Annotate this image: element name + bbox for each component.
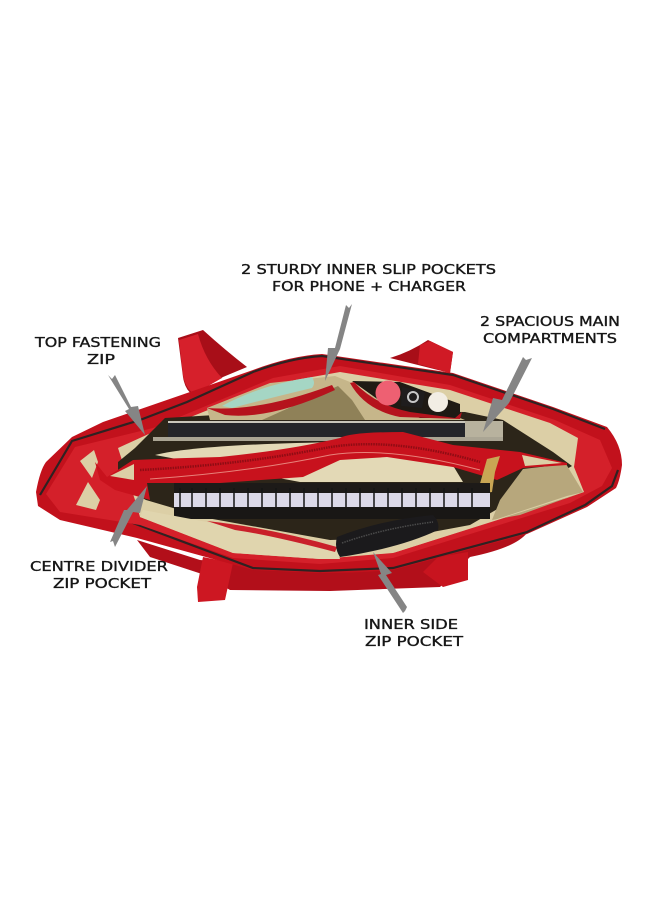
beige interior: [118, 372, 584, 559]
black piping on rim: [40, 356, 618, 571]
label: centre divider zip pocket: [30, 559, 168, 592]
dark interior cavity: [118, 410, 572, 540]
back handles: [178, 330, 453, 395]
bright red end walls: [46, 366, 612, 564]
slip pocket lining: [207, 376, 465, 420]
small beige folds at left end: [76, 450, 100, 510]
label: top fastening zip: [34, 335, 161, 368]
label: main compartments: [480, 314, 620, 347]
beige panel behind divider: [155, 442, 463, 482]
wallet in side zip pocket: [336, 515, 438, 557]
arrow: top fastening zip: [108, 375, 145, 435]
label: centre divider zip pocket: ZIP POCKET: [53, 576, 152, 592]
label: inner side zip pocket: [364, 617, 464, 650]
label: top fastening zip: ZIP: [87, 352, 115, 368]
arrow: main compartments: [483, 357, 532, 432]
centre divider zip pocket: [95, 432, 567, 500]
notebook: [174, 483, 490, 519]
lower left lining with pocket trim: [140, 510, 340, 559]
lower right beige lining: [393, 492, 584, 553]
label: inner side zip pocket: ZIP POCKET: [365, 634, 464, 650]
label: main compartments: COMPARTMENTS: [483, 331, 617, 347]
laptop: [153, 421, 503, 441]
arrow: inner side pocket: [373, 552, 407, 613]
lower outer body and front handles: [137, 533, 527, 602]
label: inner side zip pocket: INNER SIDE: [364, 617, 458, 633]
handbag photo illustration: [36, 330, 622, 602]
tan side lining at right: [492, 464, 583, 520]
label: main compartments: 2 SPACIOUS MAIN: [480, 314, 620, 330]
label: slip pockets: 2 STURDY INNER SLIP POCKETS: [241, 262, 496, 278]
arrow: centre divider: [110, 486, 147, 547]
label: slip pockets: FOR PHONE + CHARGER: [272, 279, 466, 295]
label: centre divider zip pocket: CENTRE DIVIDER: [30, 559, 168, 575]
arrow: slip pockets: [325, 304, 352, 381]
lipstick and cosmetics: [376, 380, 448, 412]
label: top fastening zip: TOP FASTENING: [34, 335, 161, 351]
outer red silhouette and rim: [36, 354, 622, 573]
phone: [222, 377, 314, 408]
label: slip pockets: [241, 262, 496, 295]
